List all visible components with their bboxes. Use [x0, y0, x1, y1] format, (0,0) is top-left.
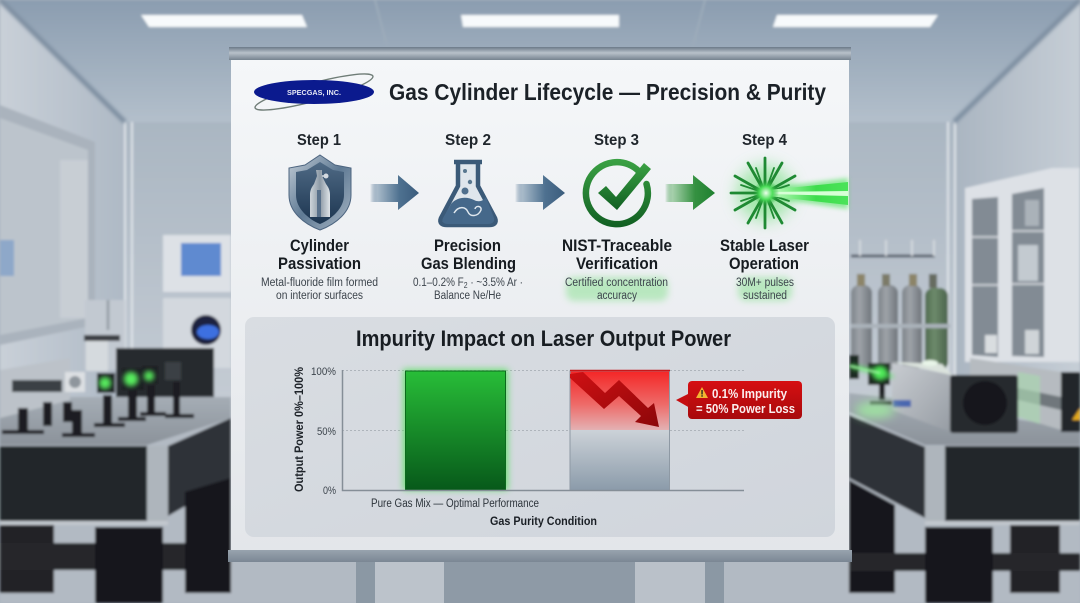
callout: power loss — [676, 381, 802, 419]
callout: power loss: 0.1% Impurity — [712, 387, 787, 401]
whiteboard bottom rail — [228, 550, 852, 562]
right wall — [954, 0, 1080, 420]
left green optics glow — [99, 371, 154, 389]
left laser body — [0, 358, 70, 418]
step 1: cylinder passivation: Cylinder — [290, 237, 350, 255]
step 4: stable laser operation: Stable Laser — [720, 237, 810, 255]
step 1: cylinder passivation: Step 1 — [297, 132, 341, 149]
icon: check mark in ring — [586, 162, 651, 224]
left wall equipment — [84, 235, 231, 371]
bar: impure gas mix — [570, 370, 670, 490]
arrow: step 3 to step 4 — [665, 175, 715, 210]
whiteboard posts — [356, 562, 724, 603]
step 2: precision gas blending: 0.1–0.2% F — [413, 277, 472, 289]
step 2: precision gas blending — [413, 132, 523, 302]
panel: impurity impact chart — [245, 317, 835, 537]
y axis labels: 100% — [311, 366, 336, 378]
back wall — [125, 122, 955, 422]
left wall — [0, 0, 125, 420]
left optical table — [0, 397, 231, 603]
step 3: NIST-traceable verification: NIST-Traceable — [562, 237, 672, 255]
title: Gas Cylinder Lifecycle — Precision & Purity — [389, 79, 826, 105]
step 3: NIST-traceable verification: Verification — [576, 255, 658, 273]
ceiling — [0, 0, 1080, 122]
right laser units — [892, 358, 1080, 433]
x axis title: Gas Purity Condition — [490, 514, 597, 528]
floor — [0, 420, 1080, 603]
left window — [0, 105, 95, 345]
step 4: stable laser operation: Operation — [729, 255, 799, 273]
green glow behind description — [738, 277, 792, 301]
glass cabinet — [965, 168, 1080, 362]
y axis labels: 0% — [323, 485, 336, 497]
arrow: step 2 to step 3 — [515, 175, 565, 210]
icon: warning triangle — [696, 387, 708, 398]
callout: power loss: = 50% Power Loss — [696, 402, 795, 416]
arrow: step 1 to step 2 — [370, 175, 419, 210]
right optical table — [849, 393, 1080, 603]
whiteboard top rail — [229, 47, 851, 60]
step 2: precision gas blending: · ~3.5% Ar · — [468, 277, 523, 289]
step 3: NIST-traceable verification: accuracy — [597, 290, 637, 302]
step 3: NIST-traceable verification: Certified concentration — [565, 277, 668, 289]
y axis labels: 50% — [317, 426, 336, 438]
step 3: NIST-traceable verification: Step 3 — [594, 132, 639, 149]
green glow behind description — [566, 277, 668, 301]
step 1: cylinder passivation: Metal-fluoride film formed — [261, 277, 378, 289]
step 3: NIST-traceable verification — [562, 132, 672, 302]
ceiling lights — [141, 15, 938, 27]
step 2: precision gas blending: Gas Blending — [421, 255, 516, 273]
left optical mounts — [2, 362, 194, 437]
y axis title: Output Power 0%–100% — [292, 367, 306, 492]
left black box — [116, 348, 214, 398]
step 4: stable laser operation — [720, 132, 848, 302]
icon: shield with gas cylinder — [289, 155, 351, 230]
step 2: precision gas blending: Balance Ne/He — [434, 290, 501, 302]
step 2: precision gas blending: 2 — [464, 281, 468, 290]
step 1: cylinder passivation: on interior surfaces — [276, 290, 363, 302]
chart heading: Impurity Impact on Laser Output Power — [356, 326, 731, 351]
step 2: precision gas blending: Step 2 — [445, 132, 491, 149]
right green optic — [849, 355, 895, 418]
step 1: cylinder passivation: Passivation — [278, 255, 361, 273]
step 2: precision gas blending: Precision — [434, 237, 501, 255]
whiteboard panel — [231, 58, 849, 551]
x axis category label: Pure Gas Mix — Optimal Performance — [371, 498, 539, 510]
step 4: stable laser operation: 30M+ pulses — [736, 277, 794, 289]
company logo — [253, 68, 375, 116]
icon: laser starburst and beam — [731, 158, 848, 228]
step 4: stable laser operation: sustained — [743, 290, 787, 302]
bar: pure gas mix — [403, 369, 508, 490]
company logo: SPECGAS, INC. — [287, 88, 341, 97]
y axis labels — [311, 366, 336, 497]
icon: flask — [440, 162, 496, 225]
gas cylinders on the wall — [851, 240, 950, 370]
icon: falling trend arrow — [570, 372, 659, 427]
step 1: cylinder passivation — [261, 132, 378, 302]
step 4: stable laser operation: Step 4 — [742, 132, 787, 149]
